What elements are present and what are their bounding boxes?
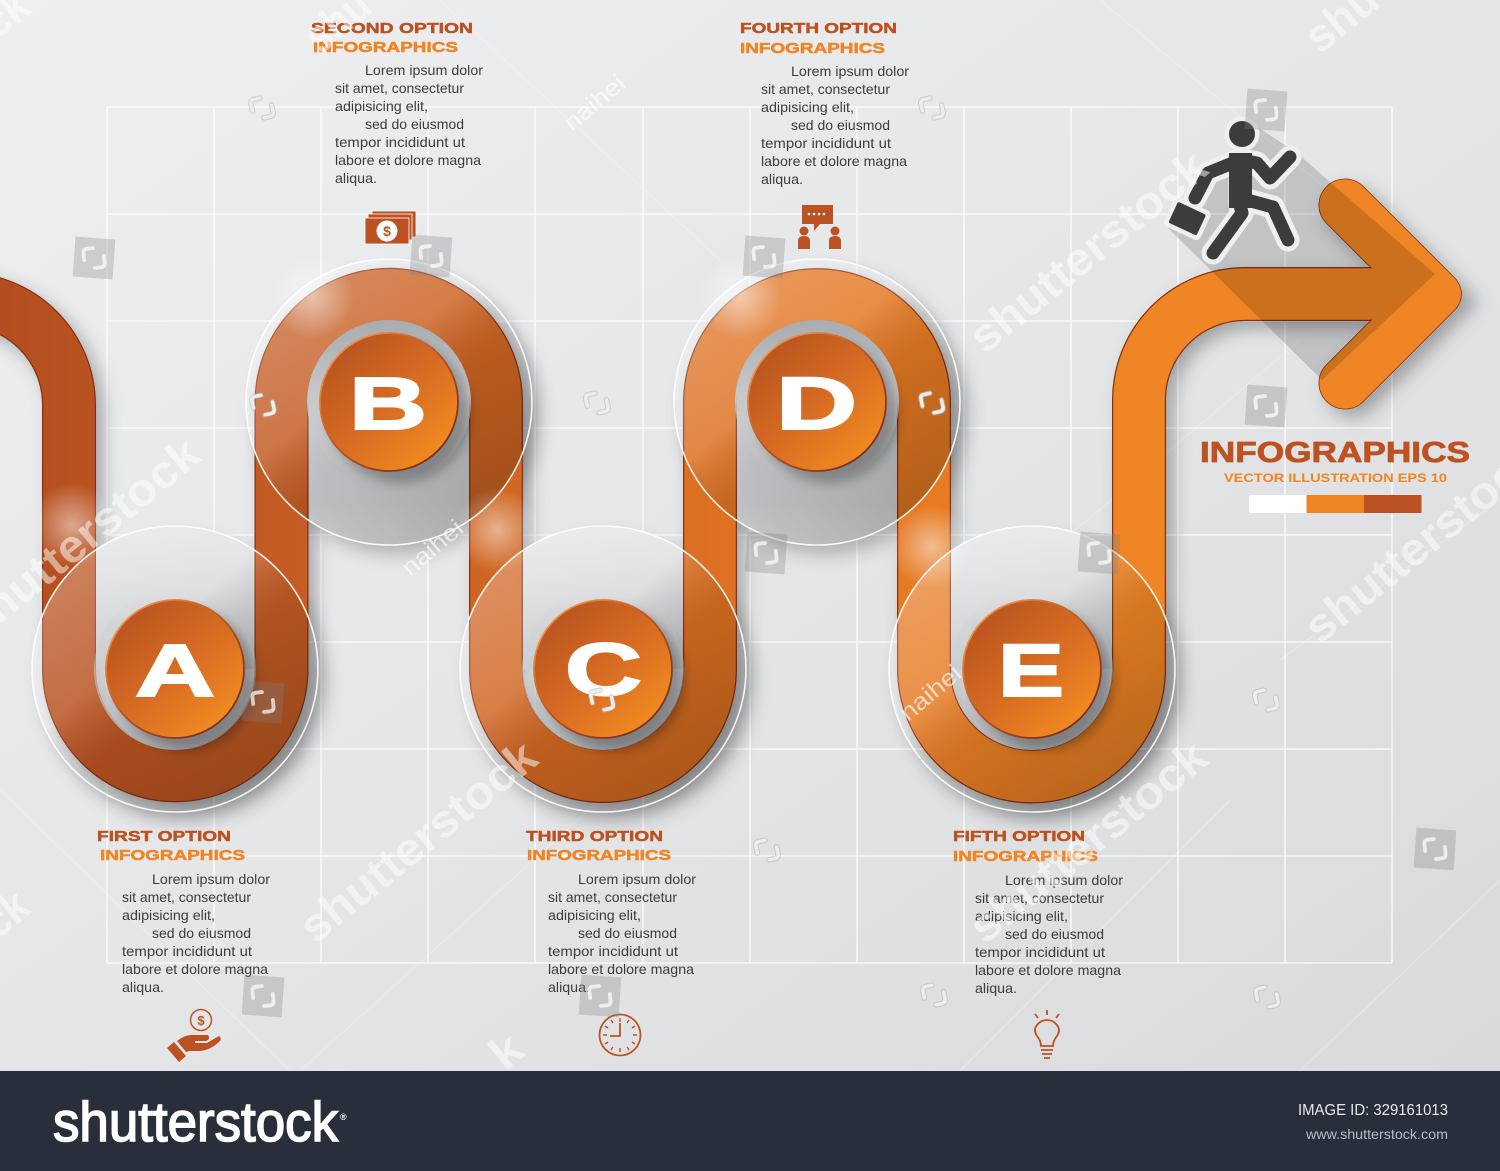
icon: light bulb [1035, 1010, 1059, 1058]
icon: people talking [798, 205, 841, 249]
heading: second option: INFOGRAPHICS [313, 39, 458, 56]
text block: second option: adipisicing elit, [335, 98, 428, 114]
badge A [94, 588, 256, 750]
badge C [522, 588, 684, 750]
long shadow of runner [1168, 122, 1435, 380]
footer registered mark: ® [340, 1112, 347, 1122]
text block: second option: tempor incididunt ut [335, 134, 465, 150]
text block: first option [122, 871, 270, 995]
icon: banknotes [365, 211, 416, 244]
subtitle: VECTOR ILLUSTRATION EPS 10 [1224, 473, 1447, 485]
watermark overlay: shutterstock [959, 730, 1217, 953]
footer url: www.shutterstock.com [1305, 1126, 1448, 1142]
badge A: A [135, 629, 215, 712]
text block: third option: labore et dolore magna [548, 961, 694, 977]
text block: fourth option: sit amet, consectetur [761, 81, 890, 97]
text block: second option: aliqua. [335, 170, 377, 186]
text block: first option: tempor incididunt ut [122, 943, 252, 959]
icon: banknotes: $ [383, 223, 391, 239]
heading: fourth option: FOURTH OPTION [740, 20, 897, 37]
decorative grid [107, 107, 1392, 963]
glass circle B [246, 255, 532, 545]
text block: fifth option: adipisicing elit, [975, 908, 1068, 924]
text block: fifth option: tempor incididunt ut [975, 944, 1105, 960]
heading: fourth option [740, 20, 897, 57]
watermark overlay: naihei [559, 70, 631, 137]
text block: fifth option [975, 872, 1123, 996]
text block: first option: aliqua. [122, 979, 164, 995]
heading: fifth option: FIFTH OPTION [953, 828, 1085, 845]
text block: fourth option [761, 63, 909, 187]
text block: fourth option: tempor incididunt ut [761, 135, 891, 151]
heading: fifth option [953, 828, 1098, 865]
text block: second option: sit amet, consectetur [335, 80, 464, 96]
title: INFOGRAPHICS [1200, 437, 1470, 469]
text block: first option: labore et dolore magna [122, 961, 268, 977]
text block: fourth option: adipisicing elit, [761, 99, 854, 115]
glass circle C [455, 488, 746, 812]
text block: fourth option: labore et dolore magna [761, 153, 907, 169]
colour swatch bar [1249, 495, 1422, 513]
badge D: D [776, 362, 857, 445]
text block: third option: sit amet, consectetur [548, 889, 677, 905]
text block: first option: Lorem ipsum dolor [152, 871, 270, 887]
text block: first option: sit amet, consectetur [122, 889, 251, 905]
icon: hand with coin [167, 1010, 221, 1062]
heading: first option: FIRST OPTION [97, 828, 231, 845]
text block: fifth option: labore et dolore magna [975, 962, 1121, 978]
badge B [307, 320, 471, 484]
inner shadow wells [95, 402, 1113, 669]
text block: fifth option: aliqua. [975, 980, 1017, 996]
text block: first option: adipisicing elit, [122, 907, 215, 923]
heading: third option: THIRD OPTION [526, 828, 663, 845]
glass circle A [30, 483, 318, 812]
watermark overlay: shutterstock [959, 140, 1217, 363]
heading: second option [311, 20, 473, 56]
badge B: B [349, 362, 427, 445]
text block: second option: Lorem ipsum dolor [365, 62, 483, 78]
text block: fifth option: Lorem ipsum dolor [1005, 872, 1123, 888]
watermark overlay: naihei [895, 660, 967, 727]
badge E: E [998, 629, 1064, 712]
text block: third option: sed do eiusmod [578, 925, 677, 941]
text block: third option [548, 871, 696, 995]
text block: first option: sed do eiusmod [152, 925, 251, 941]
watermark overlay: naihei [397, 515, 469, 582]
text block: third option: Lorem ipsum dolor [578, 871, 696, 887]
badge D [735, 320, 899, 484]
text block: second option: sed do eiusmod [365, 116, 464, 132]
badge C: C [565, 628, 642, 711]
text block: second option [335, 62, 483, 186]
glass circle E [889, 505, 1175, 812]
text block: third option: aliqua. [548, 979, 590, 995]
text block: fourth option: sed do eiusmod [791, 117, 890, 133]
watermark overlay: k [479, 1021, 533, 1080]
heading: fourth option: INFOGRAPHICS [740, 40, 885, 57]
heading: second option: SECOND OPTION [311, 20, 473, 37]
badge E [951, 588, 1113, 750]
text block: fifth option: sit amet, consectetur [975, 890, 1104, 906]
text block: fourth option: aliqua. [761, 171, 803, 187]
text block: second option: labore et dolore magna [335, 152, 481, 168]
icon: clock [600, 1014, 640, 1056]
icon: hand with coin: $ [197, 1013, 205, 1028]
heading: fifth option: INFOGRAPHICS [953, 848, 1098, 865]
icon: running businessman [1168, 121, 1290, 253]
heading: third option [526, 828, 671, 864]
glass circles soft outer shadow [43, 272, 1182, 821]
heading: first option [97, 828, 245, 864]
text block: fifth option: sed do eiusmod [1005, 926, 1104, 942]
watermark overlay: shutterstock [289, 730, 547, 953]
footer logo: shutterstock [53, 1090, 339, 1153]
ribbon shadow [0, 213, 1442, 785]
text block: fourth option: Lorem ipsum dolor [791, 63, 909, 79]
footer bar [0, 1071, 1500, 1171]
text block: third option: adipisicing elit, [548, 907, 641, 923]
heading: third option: INFOGRAPHICS [527, 847, 671, 864]
glass circle D [674, 255, 960, 545]
winding ribbon with arrow [0, 179, 1462, 776]
text block: third option: tempor incididunt ut [548, 943, 678, 959]
heading: first option: INFOGRAPHICS [100, 847, 245, 864]
footer image id: IMAGE ID: 329161013 [1298, 1102, 1448, 1119]
